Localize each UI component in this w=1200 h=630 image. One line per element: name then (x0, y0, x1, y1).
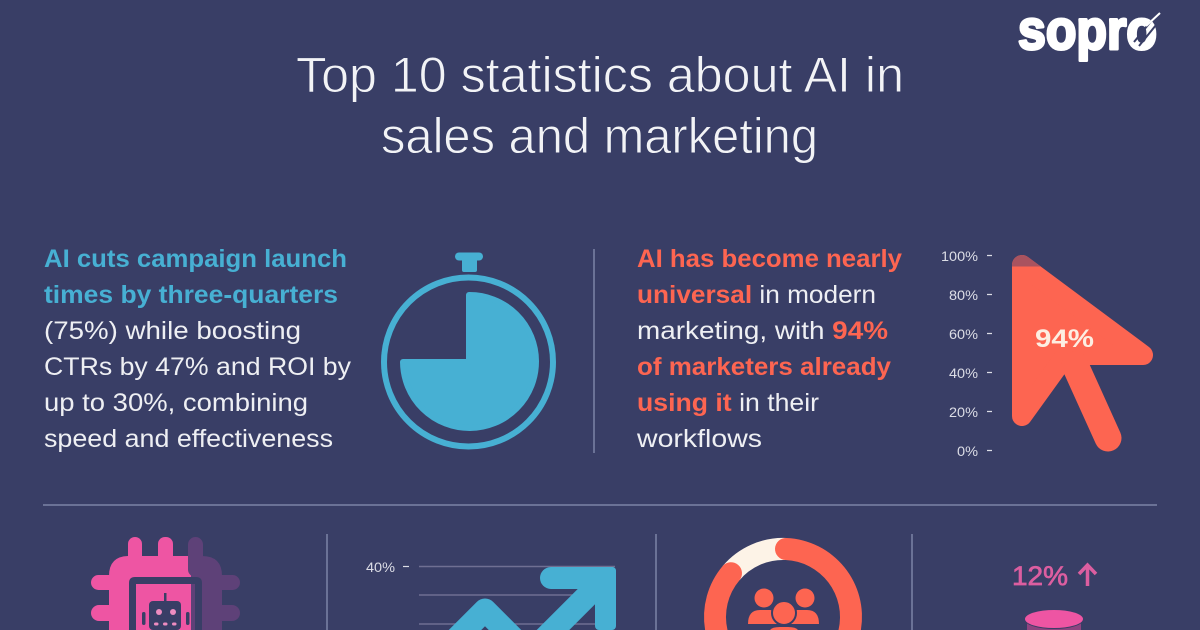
icon: AI chip with robot (91, 537, 240, 630)
text block: campaign launch: (75%) while boosting (44, 317, 301, 345)
chart: rising arrow: 40% (366, 559, 395, 575)
divider (593, 249, 595, 453)
icon: stacked coin (1024, 609, 1084, 630)
divider (911, 534, 913, 630)
panel: 12 percent increase (1012, 561, 1096, 630)
title (296, 47, 904, 164)
chart: cursor 94 percent (1022, 265, 1143, 438)
chart: donut with people icon (704, 538, 862, 630)
text block: campaign launch: CTRs by 47% and ROI by (44, 353, 352, 381)
text block: campaign launch: up to 30%, combining (44, 389, 308, 417)
chart: cursor 94 percent: 94% (1035, 325, 1094, 353)
text block: campaign launch (44, 245, 352, 453)
divider (326, 534, 328, 630)
panel: nearly universal statistic (636, 245, 1143, 459)
icon: up arrow (1079, 565, 1096, 586)
text block: campaign launch: speed and effectiveness (44, 425, 333, 453)
text block: AI adoption (636, 245, 902, 453)
text block: campaign launch: times by three-quarters (44, 281, 338, 309)
text block: AI adoption: workflows (636, 425, 762, 453)
chart axis: percent ticks: 40% (949, 365, 978, 381)
chart axis: percent ticks: 100% (941, 248, 978, 264)
divider (43, 504, 1157, 506)
text block: AI adoption: marketing, with 94% (637, 317, 888, 345)
text: 12 percent: 12% (1012, 561, 1068, 591)
chart axis: percent ticks: 0% (957, 443, 978, 459)
panel: campaign launch statistic (44, 245, 553, 453)
text block: AI adoption: of marketers already (637, 353, 891, 381)
panel: AI chip (91, 537, 240, 630)
divider (655, 534, 657, 630)
text block: campaign launch: AI cuts campaign launch (44, 245, 347, 273)
panel: audience donut (704, 538, 862, 630)
text block: AI adoption: using it in their (637, 389, 819, 417)
chart axis: percent ticks: 60% (949, 326, 978, 342)
title: sales and marketing (381, 108, 818, 164)
chart: rising arrow (366, 559, 616, 630)
title: Top 10 statistics about AI in (296, 47, 904, 103)
text block: AI adoption: universal in modern (637, 281, 876, 309)
panel: growth chart (366, 559, 616, 630)
chart axis: percent ticks: 20% (949, 404, 978, 420)
chart axis: percent ticks: 80% (949, 287, 978, 303)
text block: AI adoption: AI has become nearly (637, 245, 902, 273)
icon: stopwatch (384, 252, 553, 446)
chart axis: percent ticks (941, 248, 992, 459)
